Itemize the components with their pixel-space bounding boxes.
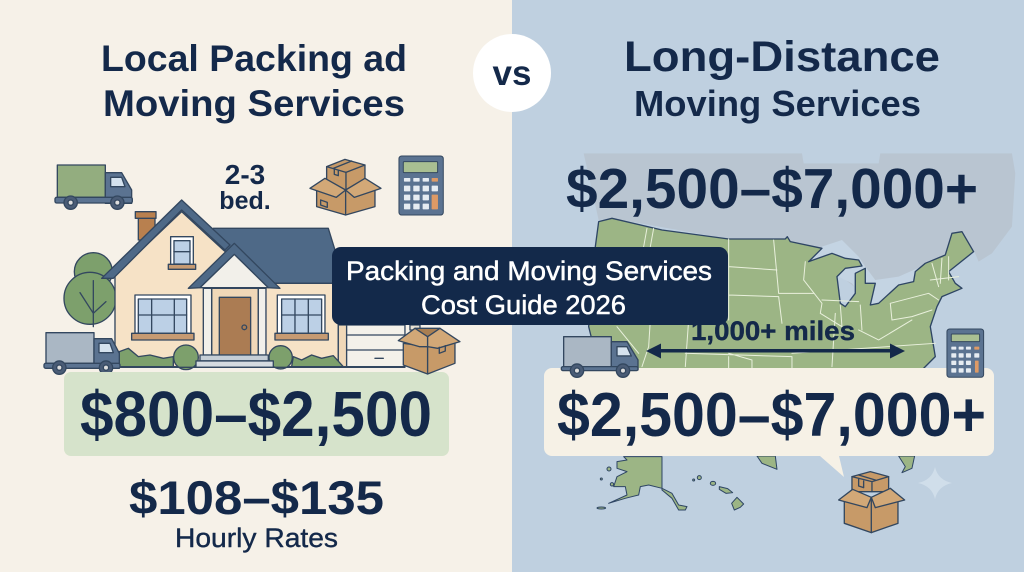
porch gable xyxy=(200,254,268,288)
icon: calculator right xyxy=(947,329,984,377)
upper window xyxy=(168,237,196,269)
hourly label: Hourly Rates xyxy=(175,523,338,553)
illustration: house xyxy=(64,200,420,370)
icon: box right xyxy=(839,472,905,533)
heading: long-distance services: Long-Distance xyxy=(624,33,940,81)
shrubs xyxy=(118,345,343,370)
left window xyxy=(132,295,194,340)
main gable roof xyxy=(102,200,230,278)
title banner xyxy=(332,247,728,325)
back roof xyxy=(213,228,335,283)
price box: long-distance: $2,500–$7,000+ xyxy=(557,381,986,450)
panel: local moving background xyxy=(0,0,512,572)
hourly price: $108–$135 xyxy=(129,471,384,524)
heading: local services: Local Packing ad xyxy=(101,38,407,79)
panel: long-distance background xyxy=(512,0,1024,572)
heading: local services xyxy=(101,38,407,124)
garage xyxy=(338,325,420,367)
right window xyxy=(275,295,328,340)
icon: green moving truck xyxy=(55,165,132,209)
porch columns and door xyxy=(212,288,258,355)
heading: local services: Moving Services xyxy=(103,83,405,124)
distance label: 1,000+ miles xyxy=(691,316,855,346)
map: Hawaii xyxy=(693,476,744,510)
heading: long-distance services xyxy=(624,33,940,124)
house body xyxy=(115,212,338,367)
title banner: Cost Guide 2026 xyxy=(421,290,626,320)
vs badge: vs xyxy=(493,54,531,93)
arrow: distance xyxy=(646,344,905,358)
icon: calculator left xyxy=(399,156,443,215)
steps xyxy=(200,355,268,361)
price box: long-distance xyxy=(544,368,994,477)
map: Texas and Florida tips xyxy=(757,456,915,473)
label: bedrooms xyxy=(219,159,271,215)
chimney xyxy=(138,218,155,240)
label: bedrooms: 2-3 xyxy=(225,159,265,190)
vs badge xyxy=(473,34,551,112)
decorative sparkle xyxy=(918,467,952,499)
price box: local: $800–$2,500 xyxy=(80,378,432,450)
ground line xyxy=(115,365,405,369)
map: Alaska xyxy=(597,457,687,510)
heading: long-distance services: Moving Services xyxy=(634,83,921,124)
label: bedrooms: bed. xyxy=(219,187,271,215)
tree xyxy=(64,253,116,327)
icon: grey truck right xyxy=(561,337,638,377)
map: Canada backdrop xyxy=(584,153,1015,310)
icon: stacked boxes xyxy=(310,159,381,215)
map: contiguous United States xyxy=(589,218,974,370)
icon: grey moving truck xyxy=(44,333,120,374)
icon: open box xyxy=(398,328,460,374)
price above map: $2,500–$7,000+ xyxy=(566,157,978,221)
title banner: Packing and Moving Services xyxy=(346,256,712,286)
